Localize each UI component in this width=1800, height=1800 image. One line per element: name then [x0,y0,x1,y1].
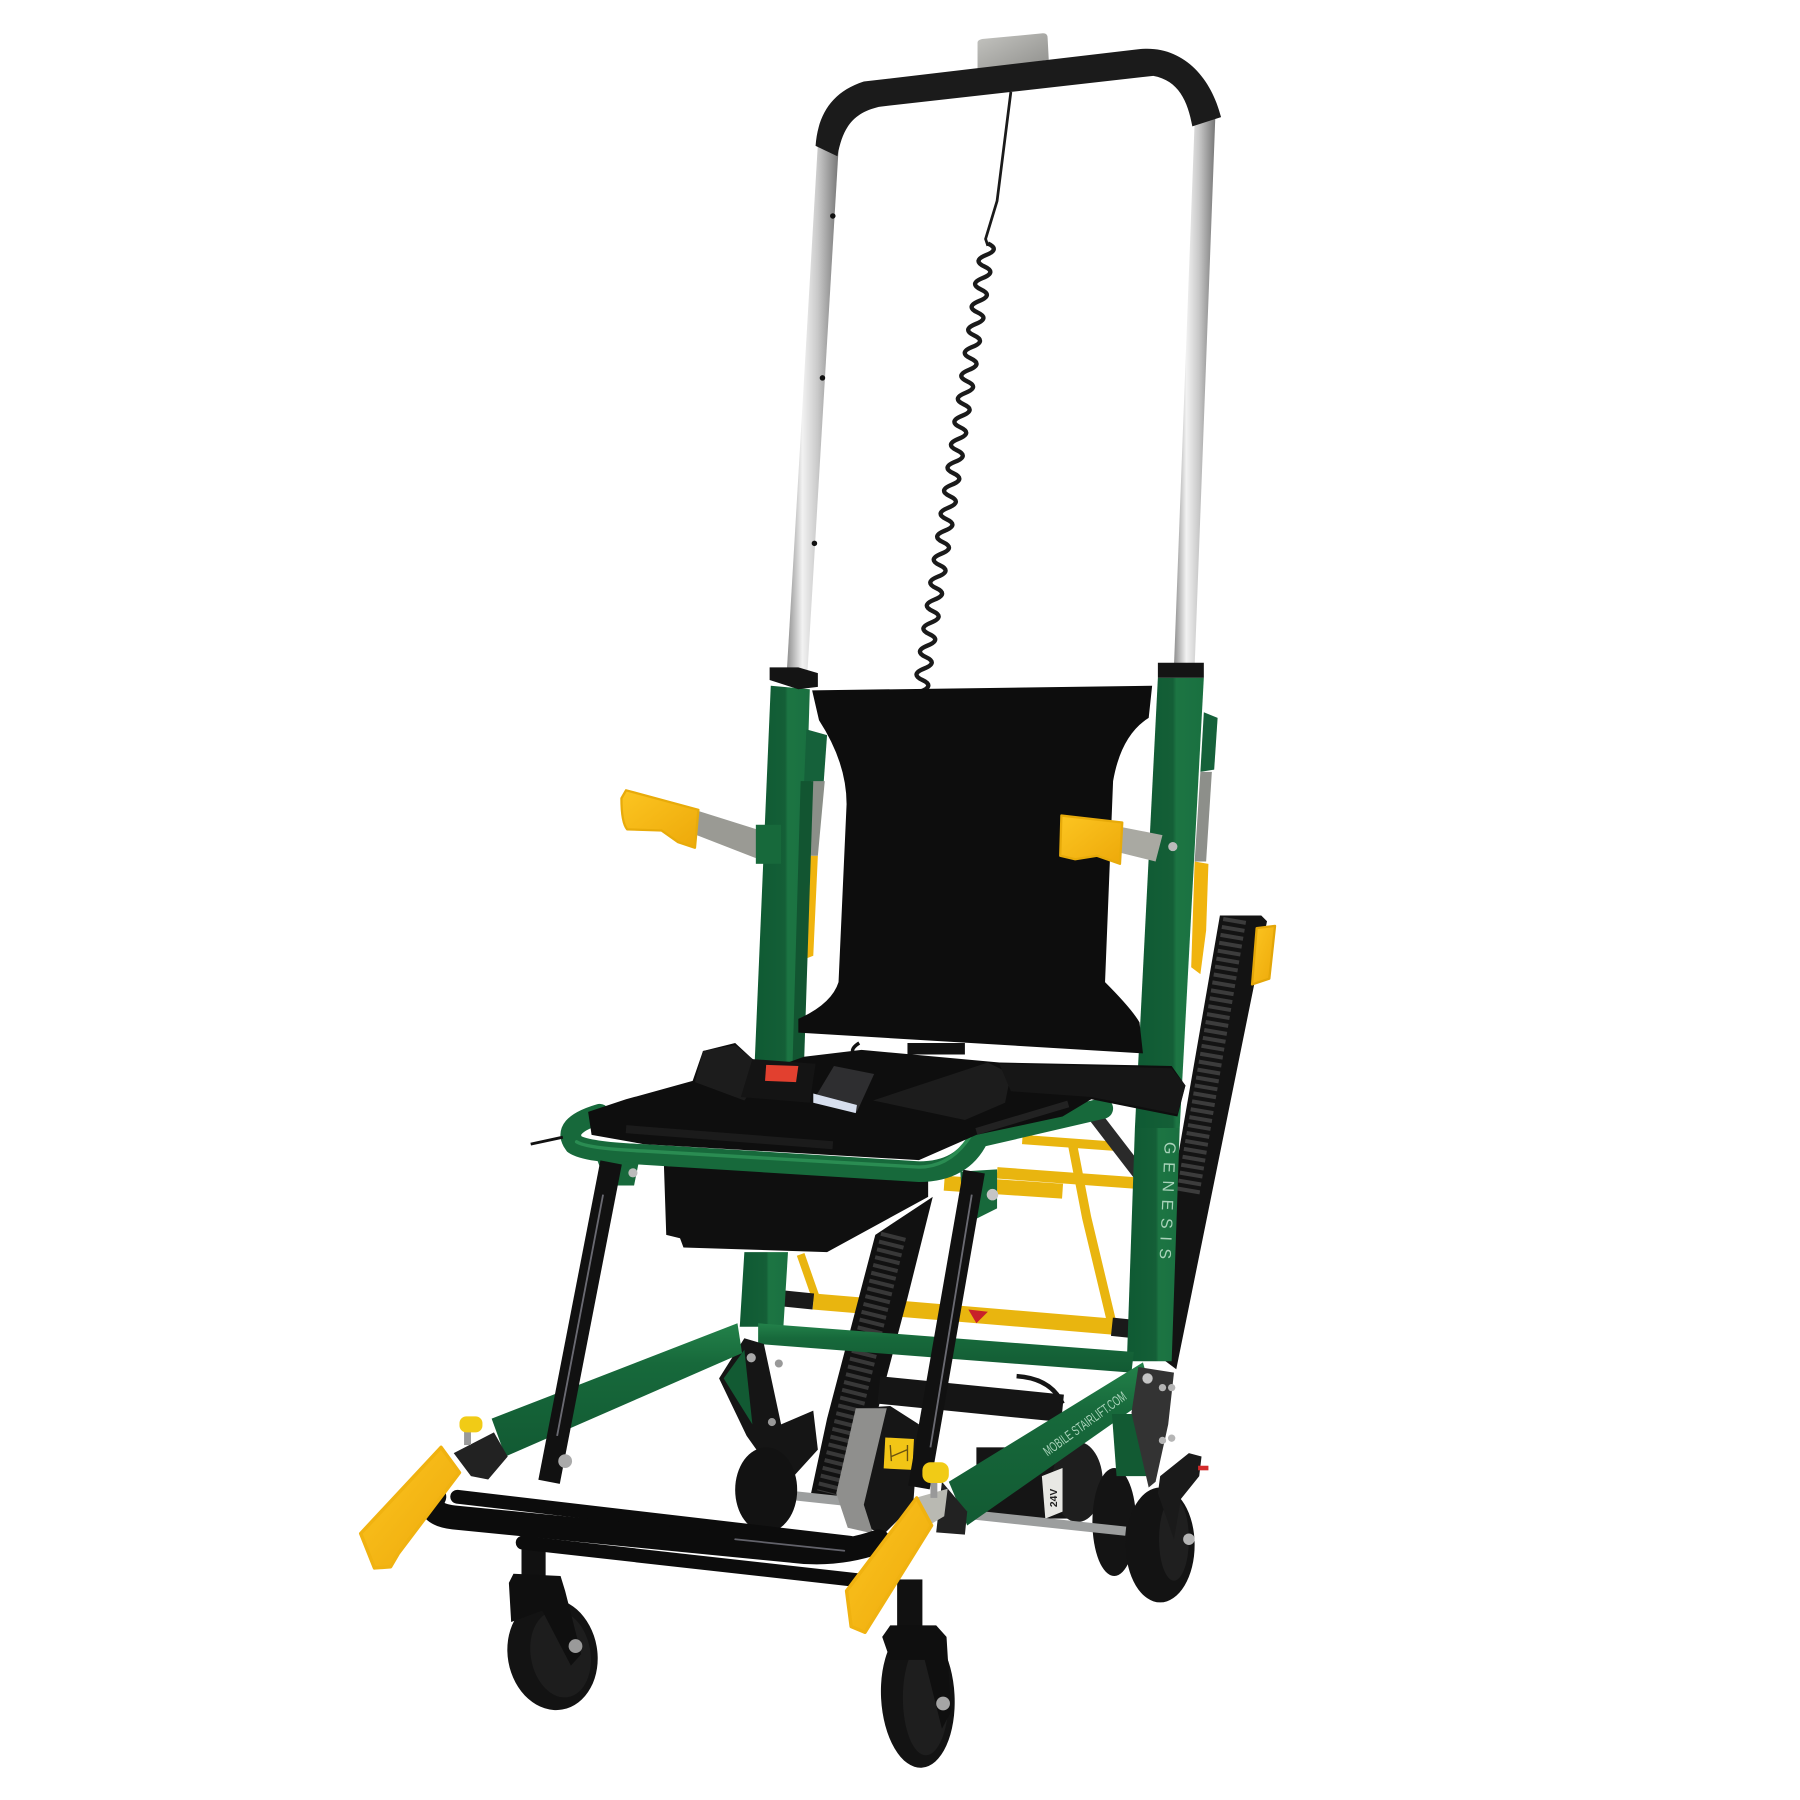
black rubber push handle [816,49,1221,156]
right base rail [949,1362,1152,1525]
left grip handle [621,790,781,864]
right backrest upright [1135,678,1218,1128]
rear wheel assembly [1112,1414,1208,1602]
left rear bracket and small wheel [719,1338,818,1532]
yellow left foot pedal [361,1447,459,1568]
black seat cushion and strap [531,1043,1185,1160]
rear motor with label [976,1442,1103,1522]
dark triangular side plate [1131,1367,1175,1488]
lower right frame post [1127,1128,1180,1361]
left base rail [492,1323,742,1457]
lower backrest cross rail [793,1022,1149,1063]
upright end caps [770,663,1204,689]
caster right [877,1579,958,1770]
green seat tube frame [571,1108,1103,1220]
battery box [664,1166,928,1252]
brand lettering GENESIS: GENESIS [1156,1142,1179,1259]
centre track under seat [810,1197,933,1499]
left backrest upright [755,686,827,1063]
coiled control cable [916,92,1011,692]
caster left [499,1539,606,1717]
black footrest tube [432,1497,879,1581]
gray motor bracket and warning sticker [836,1406,919,1534]
left rail end block and yellow knob [454,1416,572,1480]
track side wheel [1092,1468,1136,1576]
yellow guide strips [802,856,1208,974]
black cross bars [879,1376,1063,1408]
rear climbing track [1158,916,1267,1369]
right rail end block and yellow knob [916,1462,967,1535]
rear motor with label: 24V [1049,1489,1060,1507]
yellow track end cap [1252,926,1275,984]
lower left frame post [740,1252,788,1327]
lower green cross rail [758,1323,1134,1373]
rail lettering MOBILE STAIRLIFT.COM: MOBILE STAIRLIFT.COM [1041,1389,1129,1459]
black fabric backrest [798,686,1152,1053]
yellow folding frame [801,1140,1137,1327]
telescopic aluminium poles [787,117,1215,671]
handle control box [978,33,1049,70]
seat belt buckle [741,1059,874,1113]
black frame bar ends [779,1114,1140,1329]
black seat support legs [549,1162,974,1488]
yellow right foot pedal [847,1498,932,1632]
right grip handle [1060,816,1177,864]
silver drive axle [793,1496,1126,1531]
